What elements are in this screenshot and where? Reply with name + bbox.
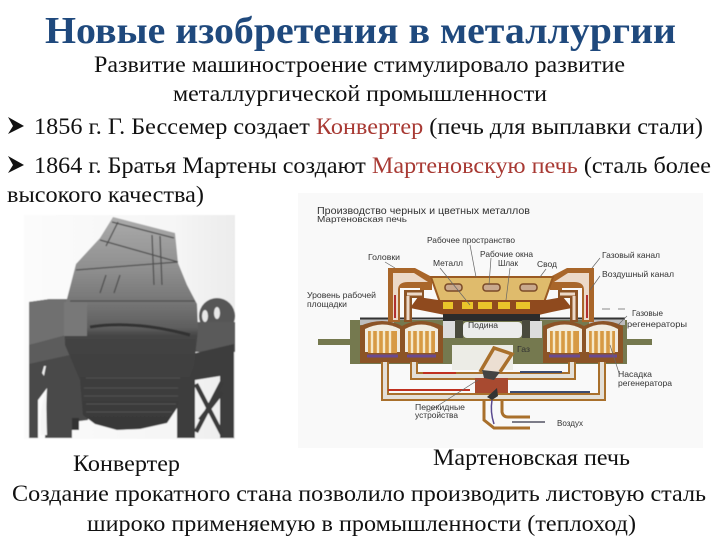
diagram labels: Насадка [618, 370, 652, 379]
upper boxes at regenerators [360, 319, 625, 325]
bullet: Bessemer converter: 1856 г. Г. Бессемер создает Конвертер (печь для выплавки стали) [34, 114, 703, 139]
gas inlet pipe [480, 348, 512, 372]
molten metal bath [410, 297, 572, 316]
hearth grate [443, 314, 540, 321]
bullet: Martin furnace: высокого качества) [7, 182, 204, 207]
caption: Martin furnace: Мартеновская печь [433, 445, 630, 470]
furnace windows [445, 284, 537, 291]
left support frame [29, 299, 88, 438]
vessel lower pin [72, 418, 79, 430]
bullet: Martin furnace [7, 153, 711, 207]
lower chamber openings [443, 321, 542, 370]
vessel shoulder [64, 302, 87, 336]
left head channels [388, 268, 432, 322]
left regenerators [360, 321, 443, 363]
diagram labels: Газовые [632, 309, 663, 318]
vessel plating lines [70, 222, 195, 412]
diagram labels [307, 236, 687, 428]
diagram labels: Газ [517, 345, 530, 354]
diagram heading: Производство черных и цветных металлов [317, 206, 530, 217]
right support frame [177, 344, 234, 438]
air inlet pipe [484, 400, 545, 428]
diagram labels: Шлак [498, 259, 518, 268]
furnace body [431, 277, 553, 311]
diagram labels: Металл [433, 259, 463, 268]
diagram labels: устройства [415, 411, 458, 420]
diagram labels: площадки [307, 300, 347, 309]
closing text: Создание прокатного стана позволило производить листовую сталь [12, 481, 706, 506]
diagram labels: Рабочие окна [480, 250, 533, 259]
intro text [94, 52, 625, 106]
vessel band highlight [90, 325, 190, 335]
closing text [12, 481, 706, 536]
diagram labels: регенераторы [627, 320, 687, 329]
diagram labels: Перекидные [415, 403, 465, 412]
right trunnion wheel [195, 298, 235, 352]
title: Новые изобретения в металлургии [45, 10, 676, 52]
diagram labels: Воздушный канал [602, 270, 674, 279]
diagram labels: Уровень рабочей [307, 291, 376, 300]
diagram subheading: Мартеновская печь [317, 214, 408, 224]
caption: converter: Конвертер [73, 451, 180, 476]
diagram labels: Свод [537, 260, 557, 269]
ground block [318, 320, 652, 364]
flue pipes [385, 362, 602, 397]
bullet: Martin furnace: 1864 г. Братья Мартены создают Мартеновскую печь (сталь более [34, 153, 711, 178]
metal blocks [443, 302, 530, 309]
right head channels [550, 268, 594, 322]
diagram labels: Воздух [557, 419, 583, 428]
image: Bessemer converter photo [24, 215, 235, 439]
diagram labels: Рабочее пространство [427, 236, 515, 245]
diagram labels: Газовый канал [602, 251, 660, 260]
diagram labels: Подина [468, 321, 498, 330]
right regenerators [543, 321, 623, 363]
diagram labels: Головки [368, 253, 400, 262]
level line [360, 318, 625, 320]
diagram labels: регенератора [618, 379, 672, 388]
image: open-hearth furnace diagram [298, 193, 703, 448]
closing text: широко применяемую в промышленности (теплоход) [87, 511, 636, 536]
converter vessel [64, 217, 198, 430]
intro text: металлургической промышленности [173, 81, 547, 106]
leader lines [385, 245, 627, 412]
reversing valve [475, 370, 508, 400]
hearth pillars [455, 320, 530, 338]
intro text: Развитие машиностроение стимулировало развитие [94, 52, 625, 77]
